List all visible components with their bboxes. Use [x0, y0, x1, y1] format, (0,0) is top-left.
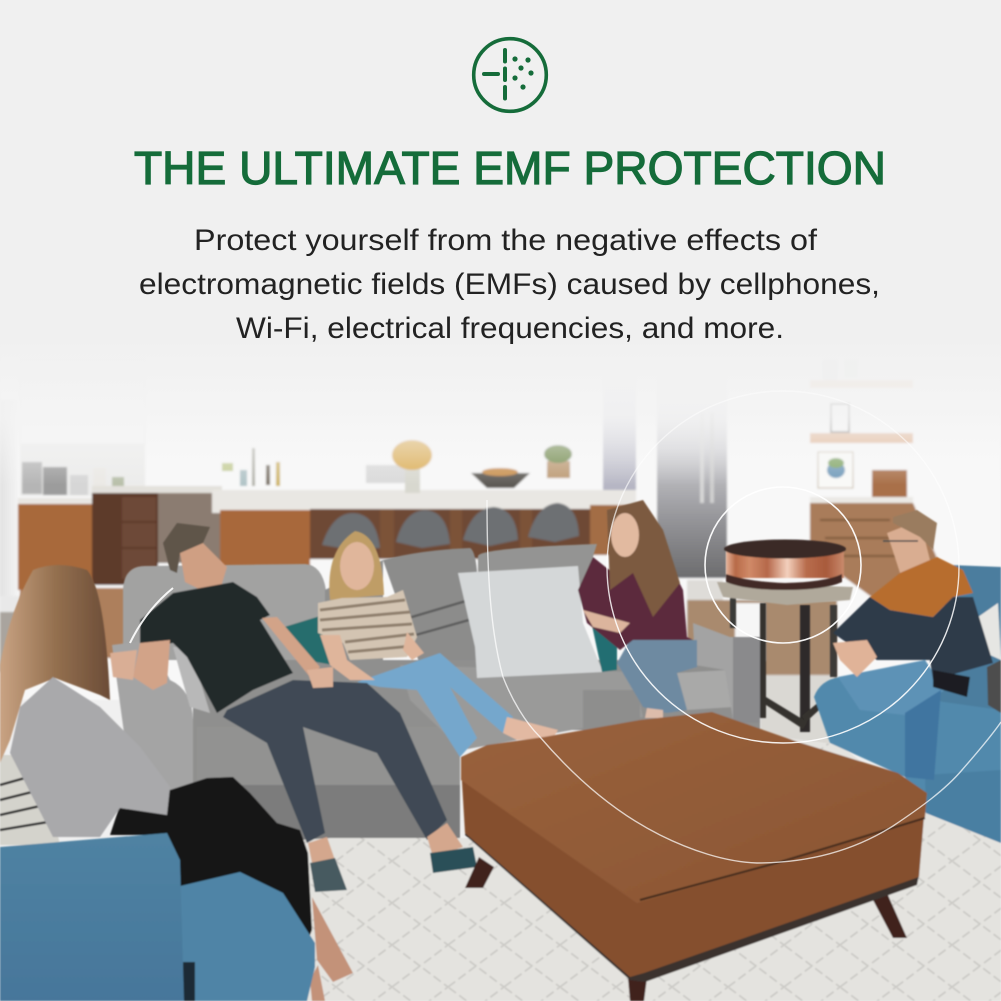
sofa pillows	[173, 566, 617, 713]
man in orange sweater on blue sofa	[814, 510, 1001, 843]
man in black shirt	[110, 523, 477, 892]
icon: EMF shield	[474, 39, 546, 111]
description text: Wi-Fi, electrical frequencies, and more.	[236, 312, 784, 345]
blue armchair and seated woman	[0, 565, 353, 1001]
kitchen island	[212, 490, 636, 570]
woman in striped shirt	[318, 531, 558, 757]
sink and bottles	[222, 448, 280, 486]
bar stools	[322, 503, 579, 550]
ottoman	[461, 712, 927, 1001]
side table	[717, 582, 853, 732]
title: THE ULTIMATE EMF PROTECTION	[134, 142, 886, 194]
fade over room into page background	[0, 335, 1001, 485]
wood cabinet right	[810, 503, 940, 598]
room background: kitchen	[0, 340, 1001, 745]
living room scene	[0, 500, 1001, 1001]
product: copper EMF device	[724, 540, 846, 590]
description text: Protect yourself from the negative effects of	[194, 224, 818, 257]
shelves	[810, 360, 913, 503]
description text: electromagnetic fields (EMFs) caused by cellphones,	[139, 268, 880, 301]
description text	[139, 224, 880, 345]
counter appliances	[22, 462, 124, 495]
rug	[300, 735, 1001, 1001]
floor	[20, 588, 130, 658]
left cabinets	[18, 486, 222, 590]
woman in maroon top	[578, 500, 697, 718]
concentric signal rings	[130, 391, 1001, 863]
flowers, bowl and plant	[392, 440, 572, 493]
grey sofa	[112, 544, 760, 840]
